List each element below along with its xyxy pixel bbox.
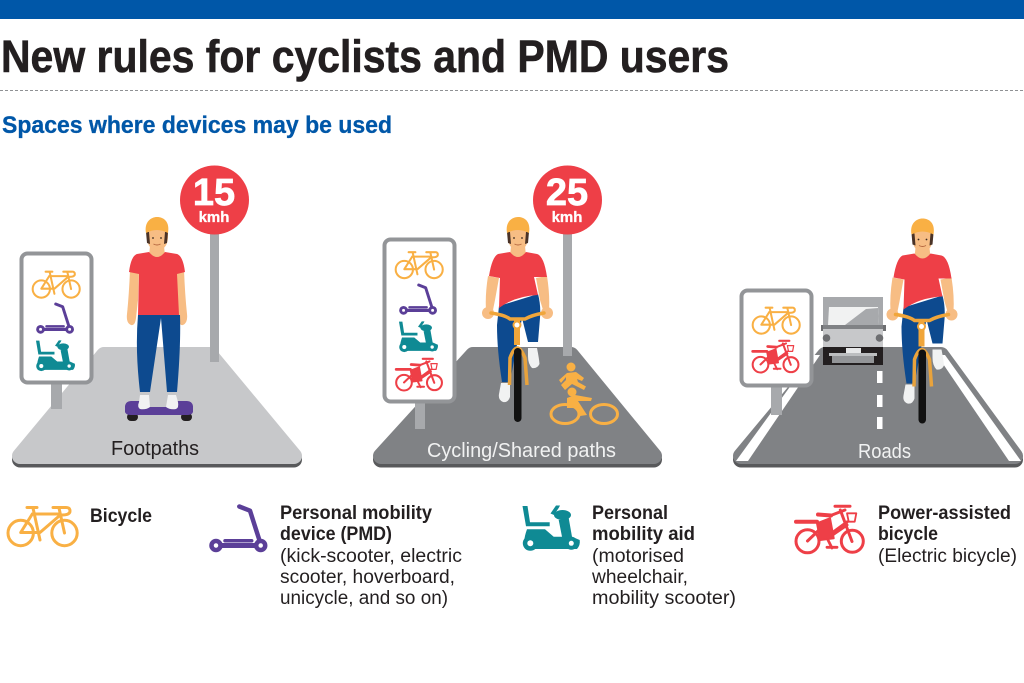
legend: personal mobility device: (kick-scooter, electric: [280, 546, 462, 567]
legend: personal mobility aid: wheelchair,: [591, 567, 688, 588]
legend: personal mobility aid: (motorised: [592, 546, 684, 567]
cyclist on path: [482, 217, 553, 422]
panel: footpaths: [20, 166, 294, 460]
allowed devices sign: [22, 254, 92, 409]
truck: [821, 297, 886, 365]
panel: cycling and shared paths: [381, 166, 654, 462]
panel: roads: [736, 218, 1021, 463]
allowed devices sign: [742, 290, 812, 415]
legend: personal mobility aid: [522, 503, 736, 609]
roads label: Roads: [858, 441, 911, 463]
allowed devices sign: [384, 240, 454, 429]
title: New rules for cyclists and PMD users: [1, 31, 729, 82]
legend: power-assisted bicycle: Power-assisted: [878, 503, 1011, 524]
section heading: Spaces where devices may be used: [2, 112, 392, 139]
road surface: [736, 355, 1021, 461]
cycling shared paths label: Cycling/Shared paths: [427, 440, 616, 462]
footpaths label: Footpaths: [111, 438, 199, 460]
speed limit sign: 15 kmh: kmh: [199, 209, 229, 226]
cyclist on road: [886, 218, 958, 424]
top banner: [0, 0, 1024, 19]
speed limit sign: 25 kmh: 25: [546, 172, 588, 214]
legend: power-assisted bicycle: [796, 503, 1017, 567]
shared path road marking: [551, 362, 618, 424]
legend: personal mobility device: unicycle, and so on): [280, 588, 448, 609]
legend: personal mobility aid: Personal: [592, 503, 668, 524]
legend: personal mobility aid: mobility scooter): [592, 588, 736, 609]
legend: bicycle: Bicycle: [90, 506, 152, 527]
lane dashes: [877, 371, 882, 429]
speed limit sign: 25 kmh: [533, 166, 602, 356]
legend: personal mobility aid: mobility aid: [592, 524, 695, 545]
speed limit sign: 15 kmh: [180, 166, 249, 362]
speed limit sign: 15 kmh: 15: [193, 172, 235, 214]
legend: power-assisted bicycle: bicycle: [878, 524, 938, 545]
legend: bicycle: [8, 506, 152, 546]
shared path platform: [381, 355, 654, 460]
legend: personal mobility device: Personal mobility: [280, 503, 432, 524]
legend: personal mobility device: scooter, hoverboard,: [280, 567, 455, 588]
legend: power-assisted bicycle: (Electric bicycle): [878, 546, 1017, 567]
person on hoverboard: [125, 217, 193, 421]
footpath platform: [20, 355, 294, 460]
legend: personal mobility device: device (PMD): [280, 524, 392, 545]
speed limit sign: 25 kmh: kmh: [552, 209, 582, 226]
legend: personal mobility device: [212, 503, 462, 609]
